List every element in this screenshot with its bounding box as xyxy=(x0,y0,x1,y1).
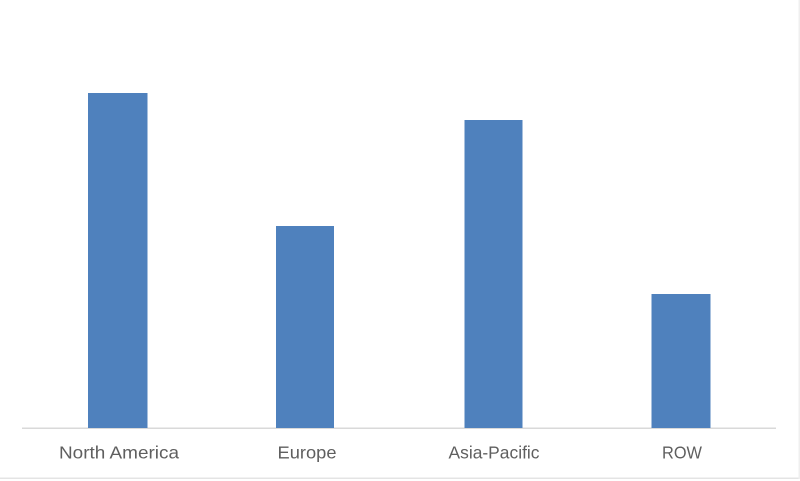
label: North America: North America xyxy=(59,442,179,462)
bar: North America xyxy=(88,93,148,428)
label: Europe: Europe xyxy=(278,442,336,462)
bar: Asia-Pacific xyxy=(464,120,522,428)
label: ROW: ROW xyxy=(662,442,702,462)
label: Asia-Pacific: Asia-Pacific xyxy=(448,442,540,462)
bar: Europe xyxy=(276,226,334,428)
bar: ROW xyxy=(652,294,710,428)
